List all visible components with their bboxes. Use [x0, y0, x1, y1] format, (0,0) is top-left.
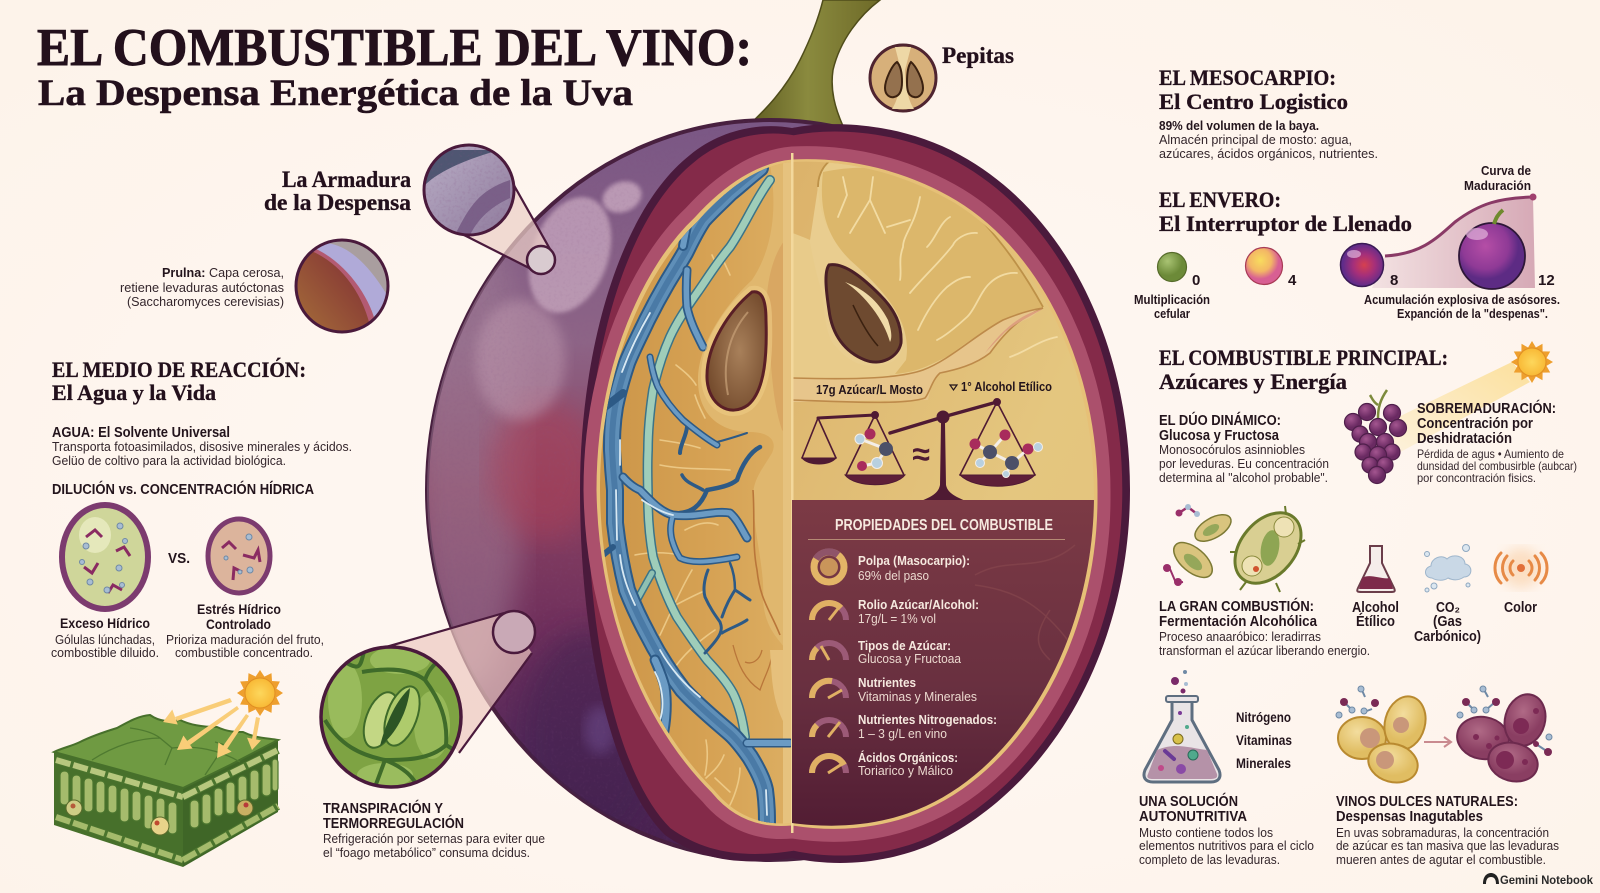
heading: envero: EL ENVERO: — [1159, 187, 1281, 212]
text: vinos dulces: mueren antes de agutar el combustible. — [1336, 852, 1546, 867]
row: tipos — [858, 638, 962, 666]
illustration: cut face of the grape — [580, 124, 1130, 863]
illustration: purple yeast cells — [1454, 690, 1551, 787]
text: estres hidrico: combustible concentrado. — [175, 645, 313, 660]
text: gran combustion: transforman el azúcar liberando energio. — [1159, 643, 1370, 658]
text: acumulacion — [1364, 293, 1560, 321]
row: acidos: Toriarico y Málico — [858, 763, 953, 778]
flesh fibers — [838, 177, 1057, 357]
illustration: swollen cell — [62, 505, 148, 609]
row: nutrientes — [858, 675, 977, 704]
illustration: molecule sugar — [855, 428, 893, 471]
icon: yellow berry — [1246, 248, 1282, 284]
label: co2: (Gas — [1433, 614, 1462, 630]
text: gran combustion: LA GRAN COMBUSTIÓN: — [1159, 597, 1314, 615]
row: nutrientes: Nutrientes — [858, 675, 916, 690]
text: duo dinamico — [1159, 411, 1329, 485]
label: nutrients list: Minerales — [1236, 755, 1291, 771]
title: La Despensa Energética de la Uva — [38, 73, 633, 114]
icon: sun and beam — [1392, 341, 1553, 455]
text: gran combustion — [1159, 597, 1370, 658]
text: duo dinamico: determina al "alcohol probable". — [1159, 470, 1328, 485]
label: nutrients list — [1236, 709, 1292, 771]
title: EL COMBUSTIBLE DEL VINO: — [37, 19, 752, 77]
labels: weeks: 0 — [1192, 272, 1200, 289]
illustration: approx sign: ≈ — [912, 436, 930, 472]
flesh band under seeds — [792, 308, 1043, 402]
text: solucion autonutritiva: completo de las levaduras. — [1139, 852, 1280, 867]
text: mesocarpio: EL MESOCARPIO: — [1159, 65, 1336, 90]
illustration: molecule ethanol — [970, 430, 1042, 478]
illustration: yeast and microbes — [1163, 500, 1314, 596]
heading: medio de reaccion: El Agua y la Vida — [52, 380, 216, 405]
text: solucion autonutritiva: elementos nutritivos para el ciclo — [1139, 838, 1314, 853]
icon: seeds circle (pepitas) — [870, 45, 936, 111]
callout: skin magnifier — [424, 145, 555, 274]
row: polpa: Polpa (Masocarpio): — [858, 553, 970, 568]
text: duo dinamico: por leveduras. Eu concentración — [1159, 456, 1329, 471]
heading: combustible principal — [1159, 345, 1448, 394]
center column of flesh — [698, 164, 783, 646]
heading: propiedades: PROPIEDADES DEL COMBUSTIBLE — [835, 517, 1053, 534]
text: estres hidrico: Estrés Hídrico — [197, 601, 281, 617]
icon: gauge rolio — [812, 603, 846, 620]
label: co2: CO₂ — [1436, 600, 1460, 616]
text: pruina: retiene levaduras autóctonas — [120, 280, 284, 295]
blue branches — [603, 210, 790, 743]
label: nutrients list: Nitrógeno — [1236, 709, 1291, 725]
icon: nutrient flask — [1144, 670, 1220, 782]
icon: co2 cloud — [1424, 544, 1471, 592]
title — [37, 19, 752, 114]
text: transpiracion: Refrigeración por seternas para eviter que — [323, 831, 545, 846]
labels: weeks — [1192, 272, 1555, 289]
illustration: grape cluster — [1344, 390, 1406, 484]
row: polpa — [858, 553, 970, 583]
icon: gauge tipos — [812, 643, 846, 660]
text: sobremaduracion: Pérdida de agus • Aumiento de — [1417, 447, 1564, 461]
illustration: stressed cell — [208, 519, 270, 593]
illustration: water vessels — [603, 168, 790, 827]
footer: gemini notebook mark: Gemini Notebook — [1500, 873, 1593, 887]
label: curva de maduracion — [1464, 164, 1531, 193]
text: vinos dulces — [1336, 794, 1559, 867]
row: rolio — [858, 597, 979, 626]
text: acumulacion: Acumulación explosiva de asósores. — [1364, 293, 1560, 307]
illustration: grape stem — [748, 0, 880, 126]
text: pruina — [120, 265, 284, 309]
row: tipos: Tipos de Azúcar: — [858, 638, 951, 653]
illustration: seed right — [826, 265, 901, 362]
text: solucion autonutritiva — [1139, 792, 1314, 867]
text: exceso hidrico: Gólulas lúnchadas, — [55, 632, 155, 647]
text: estres hidrico: Prioriza maduración del fruto, — [166, 632, 324, 647]
text: agua: AGUA: El Solvente Universal — [52, 425, 230, 441]
label: alcohol etilico: Étílico — [1356, 613, 1395, 630]
icon: color wave — [1495, 548, 1547, 588]
text: vinos dulces: de azúcar es tan masiva que las levaduras — [1336, 838, 1559, 853]
text: agua: Gelüo de coltivo para la actividad biológica. — [52, 453, 286, 468]
heading: envero: El Interruptor de Llenado — [1159, 211, 1412, 236]
label: curva de maduracion: Maduración — [1464, 179, 1531, 193]
label: co2: Carbónico) — [1414, 629, 1481, 645]
row: polpa: 69% del paso — [858, 568, 929, 583]
text: mesocarpio: El Centro Logistico — [1159, 89, 1348, 114]
labels: weeks: 12 — [1538, 272, 1555, 289]
heading: dilucion: DILUCIÓN vs. CONCENTRACIÓN HÍDRICA — [52, 480, 314, 498]
text: transpiracion: el “foago metabólico” consuma dcidus. — [323, 845, 530, 860]
callout: sugar label: 17g Azúcar/L Mosto — [816, 382, 923, 397]
blue main vessel — [612, 168, 767, 827]
text: vinos dulces: Despensas Inagutables — [1336, 809, 1483, 825]
text: gran combustion: Fermentación Alcohólica — [1159, 614, 1318, 630]
text: exceso hidrico — [51, 615, 159, 660]
row: nitrogenados — [858, 712, 997, 741]
text: multiplicacion: Multiplicación — [1134, 293, 1210, 307]
text: transpiracion: TERMORREGULACIÓN — [323, 814, 464, 832]
heading: medio de reaccion — [52, 357, 306, 405]
text: sobremaduracion: por concontración fisics. — [1417, 471, 1536, 485]
panel: fuel properties — [792, 500, 1094, 826]
faint left fibers — [635, 255, 740, 805]
heading: combustible principal: Azúcares y Energía — [1159, 369, 1347, 394]
row: nutrientes: Vitaminas y Minerales — [858, 689, 977, 704]
label: pepitas: Pepitas — [942, 43, 1014, 68]
illustration: seed left — [707, 292, 766, 410]
text: pruina: (Saccharomyces cerevisias) — [127, 294, 284, 309]
text: solucion autonutritiva: UNA SOLUCIÓN — [1139, 792, 1238, 810]
text: multiplicacion: cefular — [1154, 307, 1190, 321]
heading: combustible principal: EL COMBUSTIBLE PRINCIPAL: — [1159, 345, 1448, 370]
text: transpiracion: TRANSPIRACIÓN Y — [323, 799, 443, 817]
label: nutrients list: Vitaminas — [1236, 732, 1292, 748]
text: multiplicacion — [1134, 293, 1210, 321]
heading: envero — [1159, 187, 1412, 236]
text: gran combustion: Proceso anaaróbico: leradirras — [1159, 629, 1321, 644]
text: sobremaduracion: dunsidad del combusirble (aubcar) — [1417, 459, 1577, 473]
text: pruina: Prulna: Capa cerosa, — [162, 265, 284, 280]
illustration: grape skin body — [425, 118, 834, 862]
vessel highlights — [615, 312, 768, 816]
flesh locule around upper seed — [794, 162, 944, 378]
row: acidos — [858, 750, 958, 778]
text: sobremaduracion: Concentración por — [1417, 416, 1533, 432]
text: duo dinamico: Monosocórulos asinniobles — [1159, 442, 1305, 457]
row: rolio: Rolio Azúcar/Alcohol: — [858, 597, 979, 612]
illustration: leaf cross-section — [54, 715, 278, 867]
text: agua — [52, 425, 352, 468]
text: sobremaduracion: Deshidratación — [1417, 431, 1512, 447]
text: mesocarpio: azúcares, ácidos orgánicos, nutrientes. — [1159, 146, 1378, 161]
label: curva de maduracion: Curva de — [1481, 164, 1531, 178]
illustration: yellow yeast cells — [1338, 692, 1431, 788]
arrow: yeast change — [1424, 737, 1451, 747]
text: mesocarpio — [1159, 65, 1378, 161]
row: nitrogenados: Nutrientes Nitrogenados: — [858, 712, 997, 727]
text: exceso hidrico: combostible diluido. — [51, 645, 159, 660]
text: estres hidrico: Controlado — [206, 616, 271, 632]
text: solucion autonutritiva: AUTONUTRITIVA — [1139, 809, 1247, 825]
row: tipos: Glucosa y Fructoaa — [858, 651, 962, 666]
label: color: Color — [1504, 600, 1537, 616]
label: alcohol etilico — [1352, 600, 1399, 630]
text: vinos dulces: VINOS DULCES NATURALES: — [1336, 794, 1518, 810]
text: exceso hidrico: Exceso Hídrico — [60, 615, 150, 631]
illustration: floating molecules — [1336, 686, 1552, 756]
heading: medio de reaccion: EL MEDIO DE REACCIÓN: — [52, 357, 306, 382]
text: acumulacion: Expanción de la "despenas". — [1397, 307, 1548, 321]
chart: ripening curve — [1158, 194, 1555, 289]
icon: veraison berry — [1340, 244, 1384, 286]
text: agua: Transporta fotoasimilados, disosive minerales y ácidos. — [52, 439, 352, 454]
illustration: balance scale — [802, 398, 1035, 503]
label: co2 — [1414, 600, 1481, 645]
callout: stoma magnifier — [321, 611, 535, 800]
text: duo dinamico: EL DÚO DINÁMICO: — [1159, 411, 1281, 429]
row: rolio: 17g/L = 1% vol — [858, 611, 936, 626]
teal vessel — [637, 180, 770, 737]
callout: alcohol label: 1° Alcohol Etílico — [961, 379, 1052, 394]
icon: alcohol flask — [1357, 546, 1395, 592]
labels: weeks: 8 — [1390, 272, 1398, 289]
text: sobremaduracion — [1417, 399, 1577, 485]
heading: la armadura — [264, 167, 412, 215]
text: sobremaduracion: SOBREMADURACIÓN: — [1417, 399, 1556, 417]
row: acidos: Ácidos Orgánicos: — [858, 750, 958, 765]
icon: donut — [814, 552, 844, 582]
text: estres hidrico — [166, 601, 324, 660]
icon: green berry — [1158, 252, 1186, 282]
row: nitrogenados: 1 – 3 g/L en vino — [858, 726, 947, 741]
icon: gauge acidos — [812, 756, 846, 773]
heading: la armadura: de la Despensa — [264, 190, 412, 215]
text: mesocarpio: Almacén principal de mosto: agua, — [1159, 132, 1352, 147]
icon: gauge nutrientes — [812, 681, 846, 698]
icon: ripe berry — [1459, 210, 1525, 289]
text: solucion autonutritiva: Musto contiene todos los — [1139, 825, 1273, 840]
text: duo dinamico: Glucosa y Fructosa — [1159, 428, 1280, 444]
icon: sun with rays — [163, 670, 283, 758]
label: vs: VS. — [168, 550, 190, 567]
callout: pruina circle — [296, 240, 390, 345]
text: transpiracion — [323, 799, 545, 860]
labels: weeks: 4 — [1288, 272, 1297, 289]
label: alcohol etilico: Alcohol — [1352, 600, 1399, 616]
heading: la armadura: La Armadura — [282, 167, 411, 192]
text: mesocarpio: 89% del volumen de la baya. — [1159, 118, 1319, 133]
text: vinos dulces: En uvas sobramaduras, la concentración — [1336, 825, 1549, 840]
icon: gauge nitrogenados — [812, 720, 846, 737]
